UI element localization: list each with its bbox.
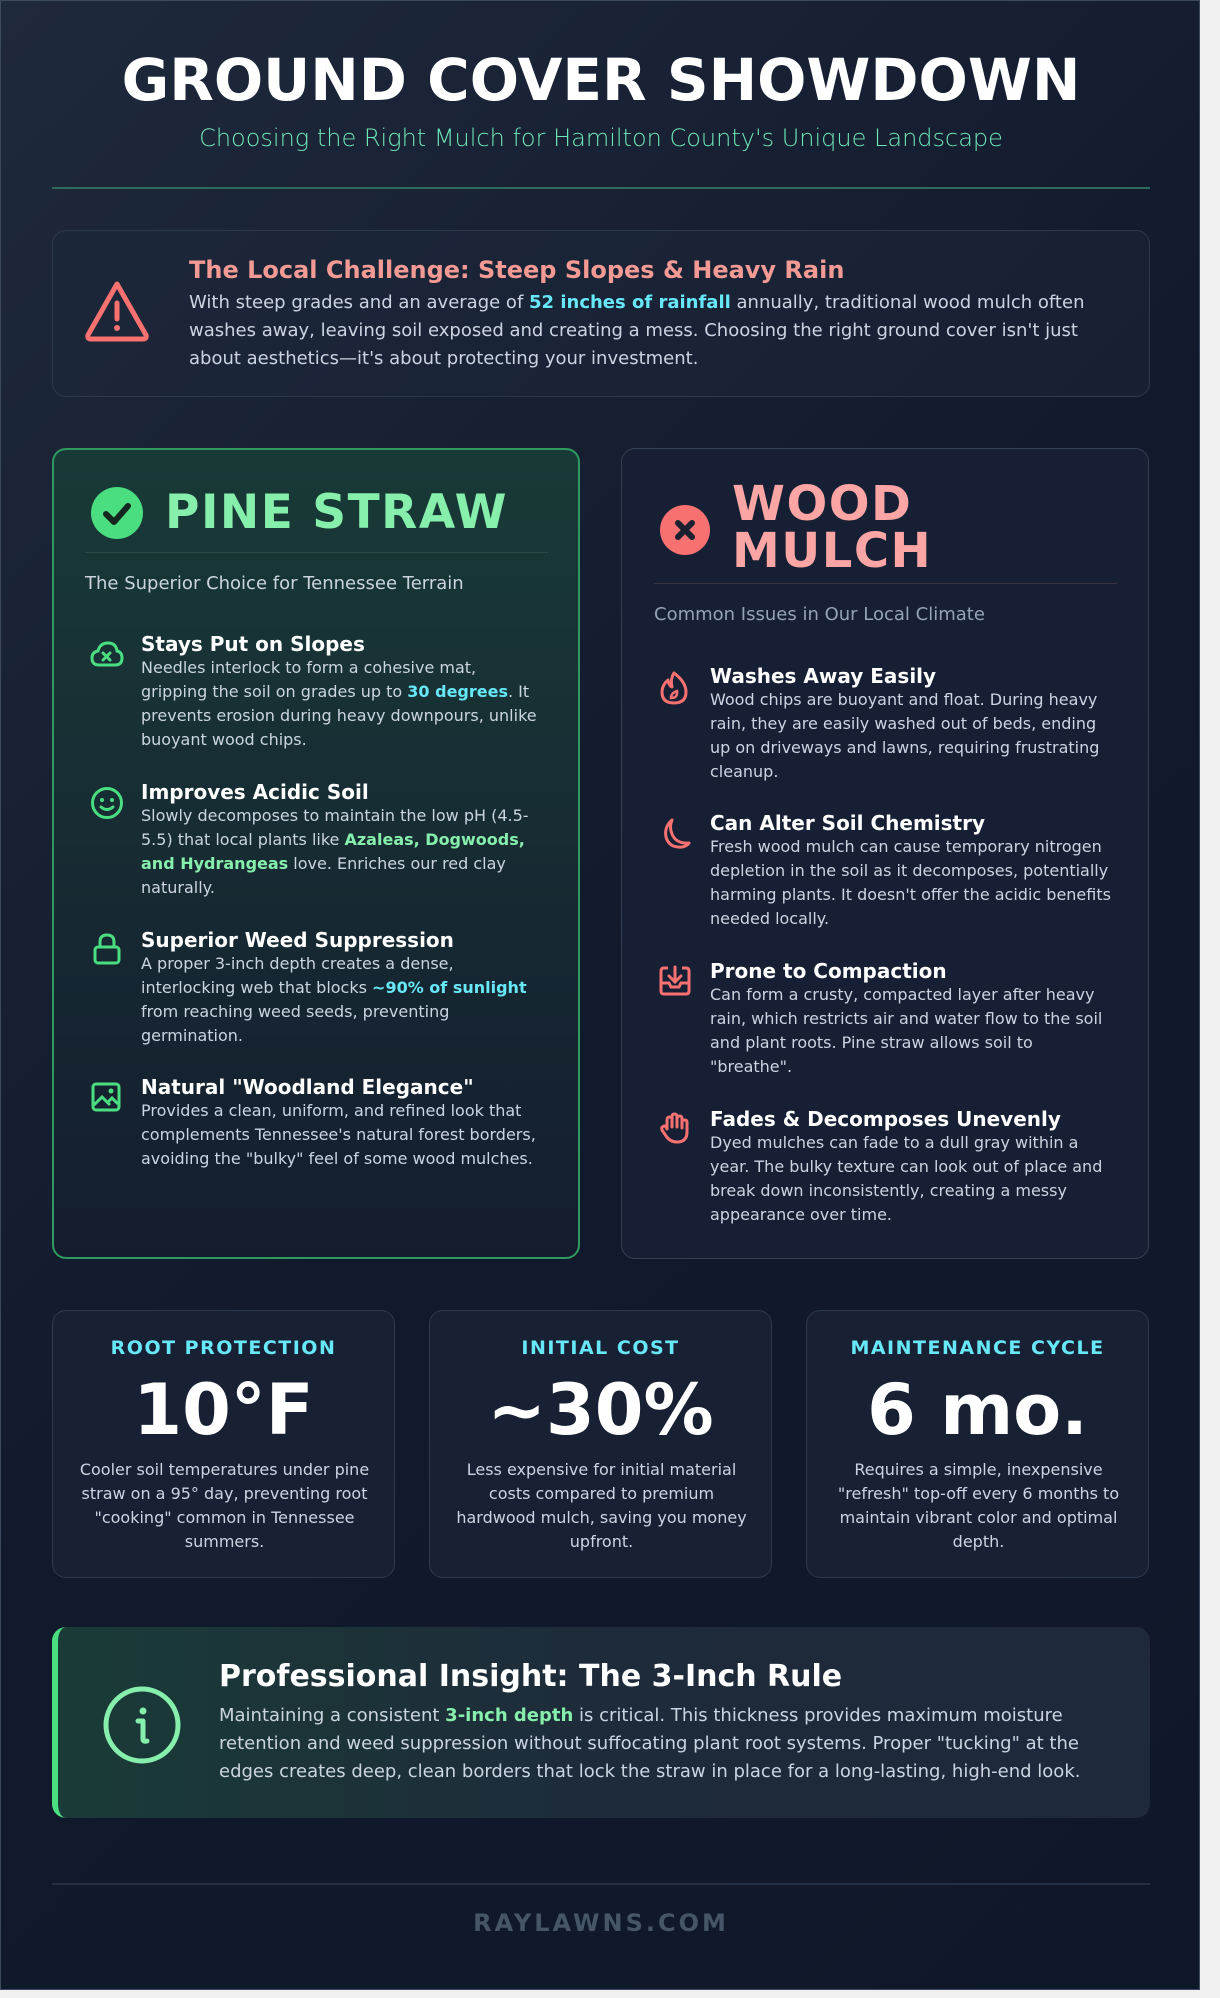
icon: warning triangle <box>85 282 149 342</box>
text: insight: Maintaining a consistent 3-inch depth is critical. This thickness provides maximum moisture retention and weed suppression without suffocating plant root systems. Proper "tucking" at the edges creates deep, clean borders that lock the straw in place for a long-lasting, high-end look. <box>219 1705 1080 1782</box>
stat: root protection: Cooler soil temperatures under pine straw on a 95° day, preventing root "cooking" common in Tennessee summers. <box>80 1460 369 1551</box>
stat: initial cost: INITIAL COST <box>521 1337 680 1359</box>
icon: x circle <box>660 505 710 555</box>
stat: root protection: ROOT PROTECTION <box>111 1337 336 1359</box>
icon: lock <box>94 934 120 964</box>
panel: professional insight <box>52 1627 1150 1818</box>
icon: image <box>92 1082 120 1112</box>
item: soil chemistry <box>664 811 1111 928</box>
subtitle: Choosing the Right Mulch for Hamilton County's Unique Landscape <box>199 124 1003 152</box>
icon: moon <box>664 818 691 849</box>
stat: maintenance cycle: MAINTENANCE CYCLE <box>850 1337 1105 1359</box>
item: stays put on slopes <box>90 632 537 749</box>
stat: maintenance cycle: Requires a simple, inexpensive "refresh" top-off every 6 months to maintain vibrant color and optimal depth. <box>838 1460 1119 1551</box>
text: washes away: Wood chips are buoyant and float. During heavy rain, they are easily washed out of beds, ending up on driveways and lawns, requiring frustrating cleanup. <box>710 690 1099 781</box>
item: improves acidic soil <box>91 780 529 897</box>
icon: smiley <box>91 787 123 819</box>
text: stays put: Needles interlock to form a cohesive mat, gripping the soil on grades up to 30 degrees. It prevents erosion during heavy downpours, unlike buoyant wood chips. <box>141 658 537 749</box>
heading: weed suppression: Superior Weed Suppression <box>141 928 454 952</box>
item: woodland elegance <box>92 1075 536 1168</box>
icon: tray arrow <box>660 966 690 996</box>
text: fades: Dyed mulches can fade to a dull gray within a year. The bulky texture can look out of place and break down inconsistently, creating a messy appearance over time. <box>710 1133 1102 1224</box>
icon: info circle <box>104 1686 180 1764</box>
text: compaction: Can form a crusty, compacted layer after heavy rain, which restricts air and water flow to the soil and plant roots. Pine straw allows soil to "breathe". <box>710 985 1102 1076</box>
icon: check circle <box>91 487 143 539</box>
title: GROUND COVER SHOWDOWN <box>122 46 1080 114</box>
stat: root protection: 10°F <box>133 1369 314 1451</box>
text: woodland elegance: Provides a clean, uniform, and refined look that complements Tennessee's natural forest borders, avoiding the "bulky" feel of some wood mulches. <box>141 1101 536 1168</box>
heading: pine straw: PINE STRAW <box>165 485 508 540</box>
footer brand: RAYLAWNS.COM <box>473 1909 729 1937</box>
stat: maintenance cycle <box>806 1310 1149 1578</box>
heading: wood mulch: MULCH <box>732 523 932 579</box>
heading: acidic soil: Improves Acidic Soil <box>141 780 369 804</box>
text: pine straw subtitle: The Superior Choice for Tennessee Terrain <box>85 573 464 594</box>
heading: compaction: Prone to Compaction <box>710 959 947 983</box>
text: weed suppression: A proper 3-inch depth creates a dense, interlocking web that blocks ~90% of sunlight from reaching weed seeds, preventing germination. <box>141 954 527 1045</box>
heading: wood mulch: WOOD <box>732 476 912 532</box>
icon: hand <box>660 1112 688 1144</box>
heading: stays put: Stays Put on Slopes <box>141 632 365 656</box>
text: wood mulch subtitle: Common Issues in Our Local Climate <box>654 604 985 625</box>
stat: initial cost <box>429 1310 772 1578</box>
icon: flame <box>660 671 688 704</box>
text: acidic soil: Slowly decomposes to maintain the low pH (4.5-5.5) that local plants like Azaleas, Dogwoods, and Hydrangeas love. Enriches our red clay naturally. <box>141 806 529 897</box>
item: compaction <box>660 959 1102 1076</box>
item: weed suppression <box>94 928 527 1045</box>
item: washes away <box>660 664 1099 781</box>
text: challenge description: With steep grades and an average of 52 inches of rainfall annually, traditional wood mulch often washes away, leaving soil exposed and creating a mess. Choosing the right ground cover isn't just about aesthetics—it's about protecting your investment. <box>189 292 1084 369</box>
heading: fades: Fades & Decomposes Unevenly <box>710 1107 1061 1131</box>
item: fades <box>660 1107 1102 1224</box>
heading: woodland elegance: Natural "Woodland Elegance" <box>141 1075 474 1099</box>
stat: initial cost: ~30% <box>487 1369 714 1451</box>
icon: cloud <box>90 642 124 666</box>
heading: insight: Professional Insight: The 3-Inch Rule <box>219 1659 842 1694</box>
text: soil chemistry: Fresh wood mulch can cause temporary nitrogen depletion in the soil as it decomposes, potentially harming plants. It doesn't offer the acidic benefits needed locally. <box>710 837 1111 928</box>
stat: initial cost: Less expensive for initial material costs compared to premium hardwood mulch, saving you money upfront. <box>456 1460 747 1551</box>
heading: wood mulch <box>732 476 932 579</box>
panel: wood mulch <box>621 448 1149 1259</box>
panel: local challenge <box>52 230 1150 397</box>
heading: local challenge: The Local Challenge: Steep Slopes & Heavy Rain <box>189 256 844 284</box>
heading: washes away: Washes Away Easily <box>710 664 936 688</box>
stat: root protection <box>52 1310 395 1578</box>
panel: pine straw <box>52 448 580 1259</box>
stat: maintenance cycle: 6 mo. <box>867 1369 1088 1451</box>
heading: soil chemistry: Can Alter Soil Chemistry <box>710 811 985 835</box>
